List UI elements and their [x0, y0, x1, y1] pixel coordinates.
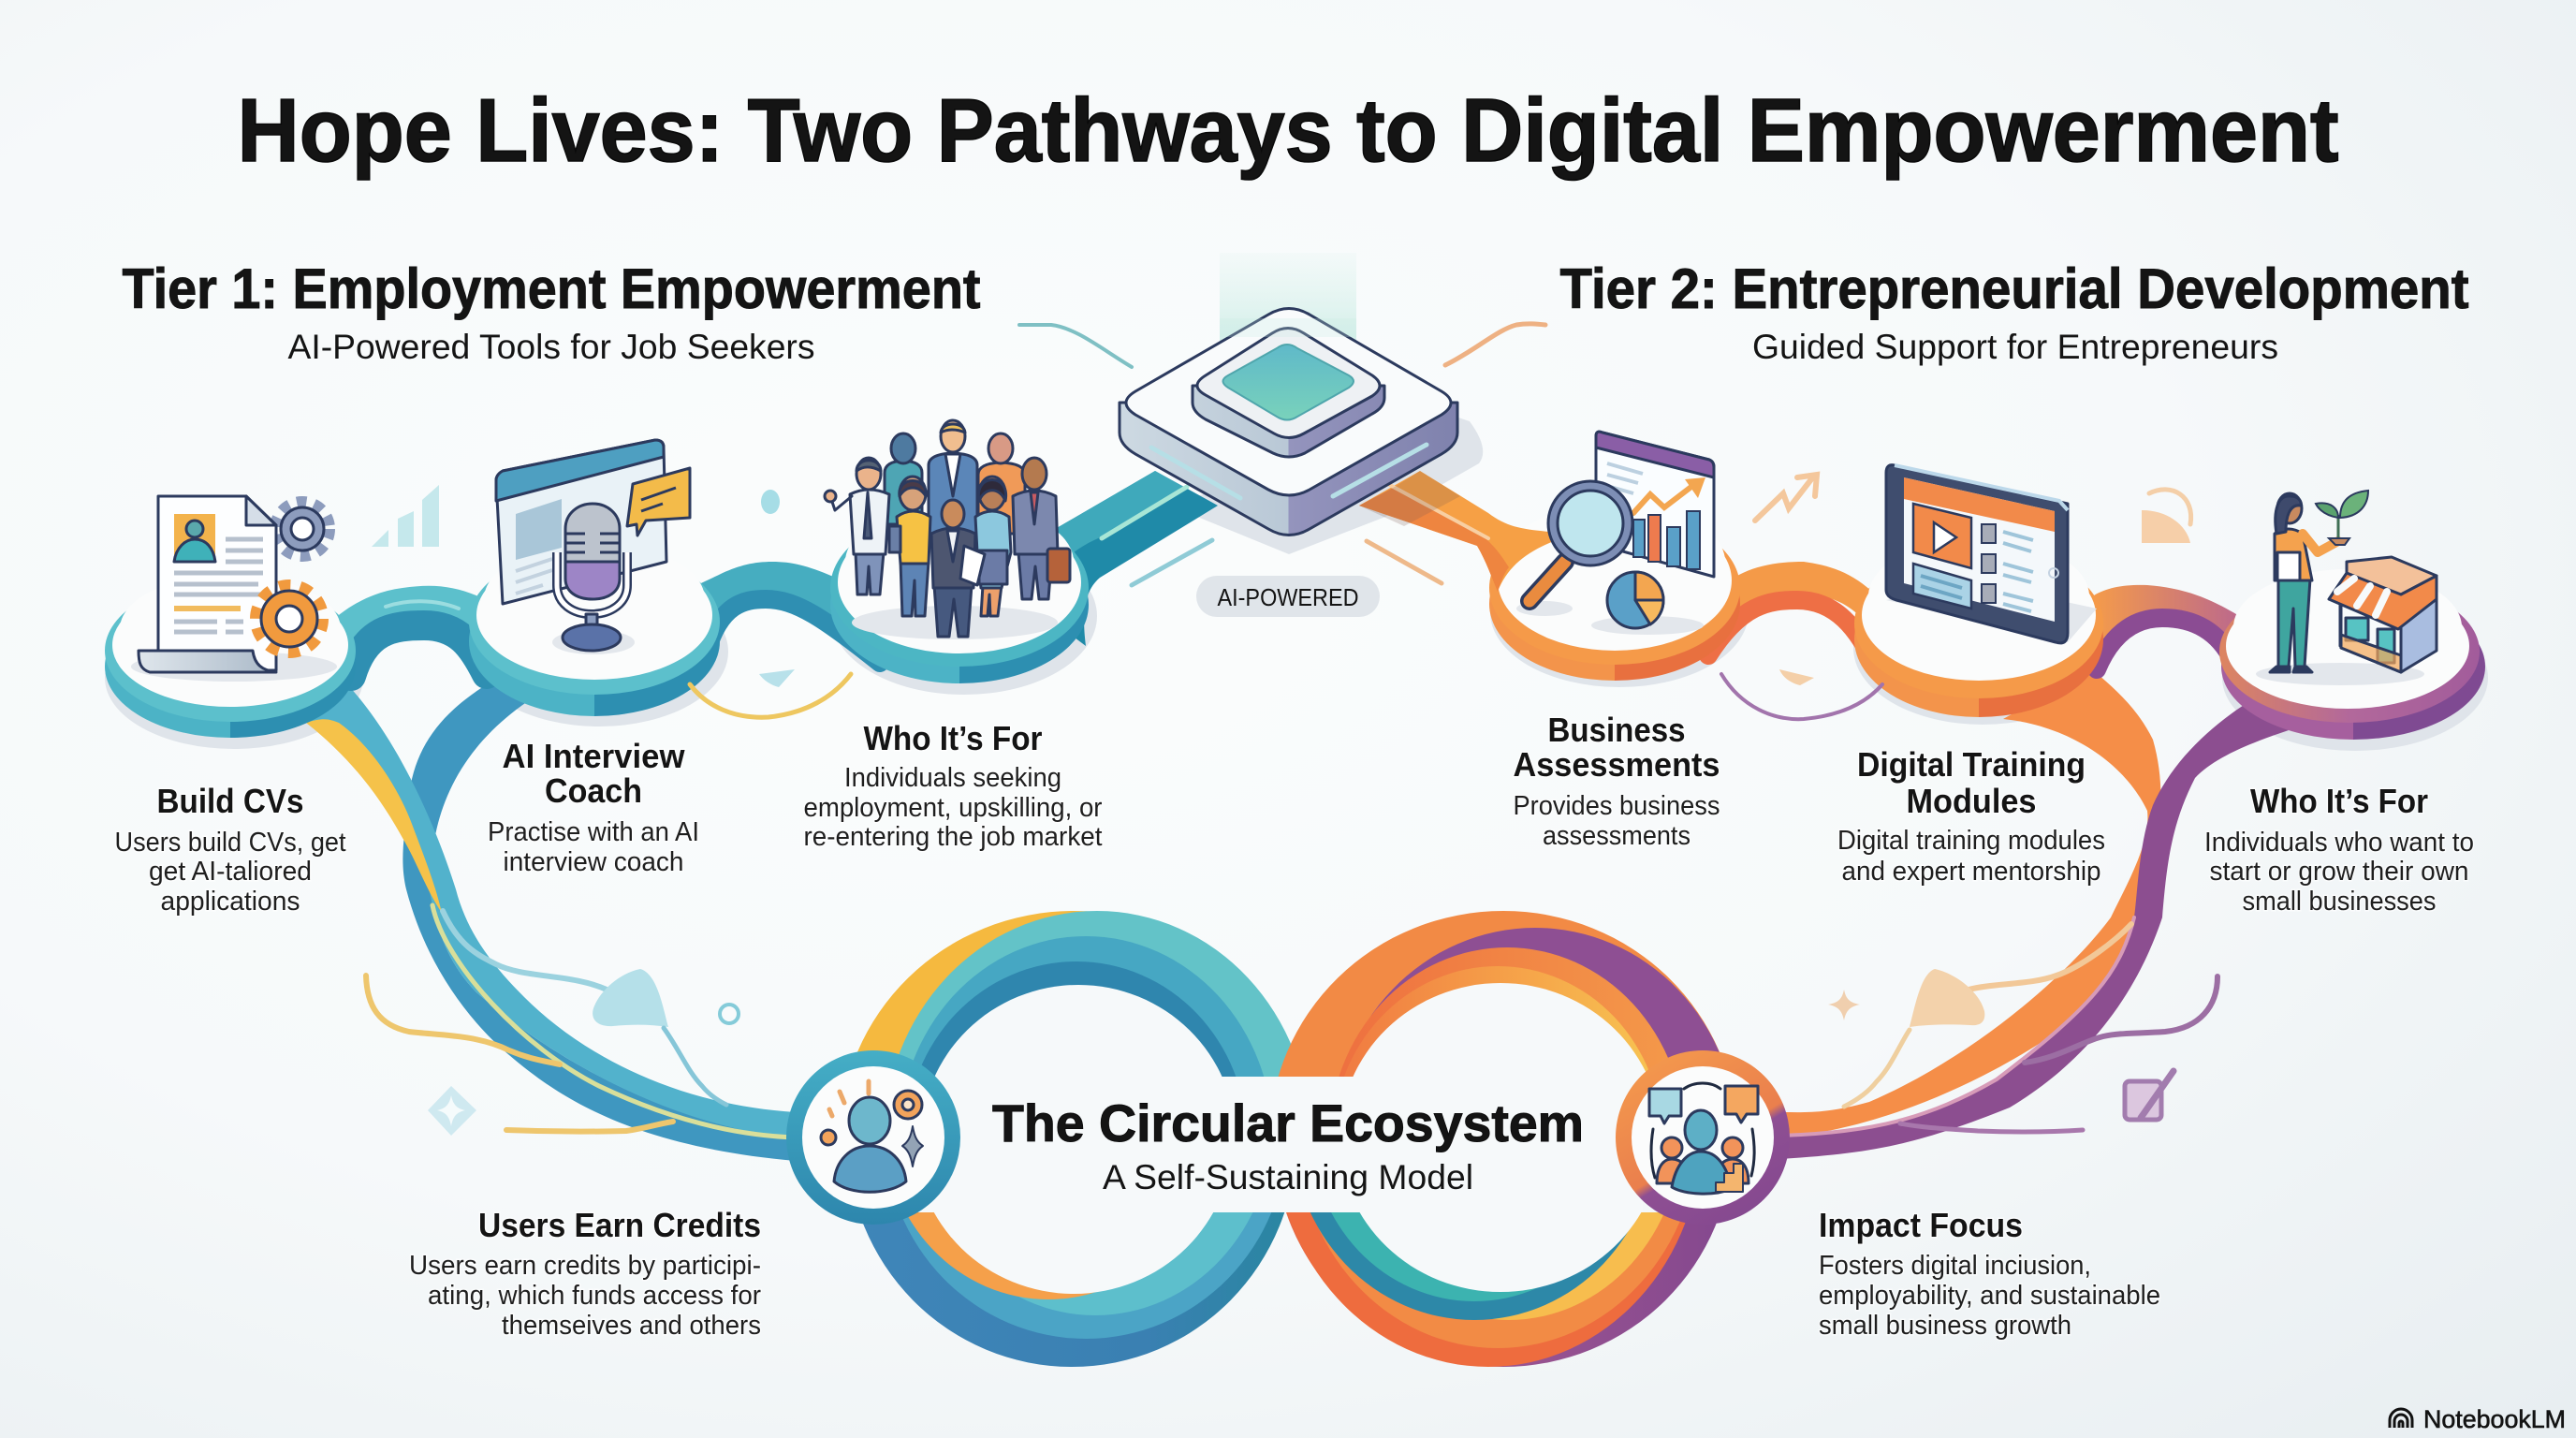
- speech bubble: [627, 468, 690, 536]
- centre heading: the circular ecosystem: A Self-Sustaining Model: [1103, 1158, 1473, 1196]
- road to hub: [1359, 471, 1554, 592]
- label: users earn credits: themseives and others: [502, 1311, 761, 1341]
- magnifier: [1530, 562, 1565, 601]
- icon: CV document with gears: [131, 496, 337, 682]
- icon: refresh decoration: [2142, 490, 2191, 543]
- label: build CVs: [114, 782, 346, 917]
- icon: person with coins: [821, 1091, 923, 1192]
- glowing teal core: [1222, 345, 1354, 419]
- title: Hope Lives: Two Pathways to Digital Empowerment: [238, 81, 2338, 181]
- woman in yellow: [889, 477, 930, 616]
- disc 4: [1489, 527, 1740, 681]
- scroll base: [139, 651, 276, 672]
- icon: growth arrow decoration: [1755, 475, 1817, 521]
- label: who it's for, tier 1: [803, 719, 1103, 852]
- tier 1 heading: Tier 1: Employment Empowerment: [122, 257, 981, 320]
- hub accent lines: [1019, 324, 1545, 585]
- label: users earn credits: Users earn credits by participi-: [409, 1251, 761, 1281]
- connector 5-6: [2073, 585, 2254, 655]
- AI hub chip: [1120, 253, 1457, 536]
- label: who it's for, tier 1: Who It’s For: [863, 719, 1043, 757]
- centre heading: the circular ecosystem: The Circular Ecosystem: [992, 1093, 1584, 1152]
- orange gear: [256, 586, 322, 652]
- right chain ribbon to AI hub: [1359, 471, 2485, 740]
- left main ribbon sweep: [300, 679, 796, 1161]
- tier 1 heading: [122, 257, 981, 366]
- icon: teal drop: [761, 490, 780, 514]
- centre heading: the circular ecosystem: [992, 1093, 1584, 1196]
- label: digital training modules: and expert mentorship: [1842, 857, 2100, 887]
- icon: notebook arcs: [2390, 1409, 2412, 1428]
- connector 2-3: [688, 562, 866, 651]
- label: AI interview coach: Coach: [545, 771, 642, 810]
- shop: [2329, 557, 2437, 672]
- centre plate: [936, 1077, 1643, 1212]
- man in white shirt: [825, 458, 889, 594]
- label: business assessments: Assessments: [1513, 745, 1720, 784]
- trend arrow: [1633, 483, 1696, 513]
- label: digital training modules: Modules: [1906, 782, 2037, 820]
- icon: group of job seekers: [825, 420, 1070, 639]
- label: users earn credits: Users Earn Credits: [478, 1206, 761, 1244]
- label: build CVs: get AI-taliored: [149, 857, 312, 887]
- tier 2 heading: Guided Support for Entrepreneurs: [1752, 328, 2278, 366]
- circular ecosystem infinity rings: [840, 899, 1737, 1368]
- label: digital training modules: Digital Training: [1857, 745, 2086, 784]
- AI-powered badge: [1196, 576, 1380, 617]
- chip inner tier: [1193, 386, 1384, 457]
- disc 5: [1854, 562, 2103, 717]
- beam overlay: [1220, 318, 1356, 337]
- right ring bottom: [1286, 1212, 1717, 1367]
- icon: entrepreneur with shop: [2256, 491, 2437, 685]
- label: build CVs: Build CVs: [157, 782, 303, 820]
- tier 2 heading: Tier 2: Entrepreneurial Development: [1559, 257, 2469, 320]
- label: who it's for, tier 1: re-entering the job market: [803, 822, 1103, 852]
- left chain ribbon to AI hub: [105, 471, 1218, 738]
- gray gear: [276, 503, 329, 555]
- chip body: [1120, 403, 1457, 536]
- label: who it's for, tier 1: Individuals seeking: [844, 763, 1061, 793]
- icon: rising bars decoration: [372, 485, 439, 547]
- label: who it's for, tier 2: [2204, 782, 2474, 917]
- label: build CVs: applications: [161, 887, 300, 917]
- mic capsule: [565, 504, 620, 562]
- video panel: [1913, 504, 1971, 568]
- label: AI interview coach: AI Interview: [502, 737, 685, 775]
- icon: microphone on browser: [496, 440, 690, 654]
- label: impact focus: [1819, 1206, 2160, 1341]
- ribbon and hub shadows: [105, 412, 2488, 751]
- left decorative leaf and flourishes: [366, 911, 739, 1136]
- connector 1-2: [323, 586, 505, 646]
- icon: magnifier and charts: [1516, 432, 1714, 635]
- label: who it's for, tier 2: small businesses: [2243, 887, 2436, 917]
- label: impact focus: employability, and sustainable: [1819, 1281, 2160, 1311]
- disc 3: [830, 526, 1089, 683]
- label: impact focus: Fosters digital inciusion,: [1819, 1251, 2091, 1281]
- purple arc decoration: [1721, 669, 1882, 719]
- thumbnails: [1982, 524, 1996, 543]
- left ring bottom: [863, 1212, 1284, 1367]
- woman: [2270, 493, 2338, 672]
- icon: community with speech bubbles: [1649, 1086, 1758, 1194]
- mic stand: [586, 614, 597, 629]
- right ring top: [1279, 911, 1720, 1077]
- tier 1 heading: AI-Powered Tools for Job Seekers: [288, 328, 814, 366]
- label: business assessments: [1513, 711, 1720, 851]
- chart window: [1596, 432, 1714, 577]
- label: who it's for, tier 2: Who It’s For: [2250, 782, 2428, 820]
- right main ribbon sweep: [1778, 669, 2289, 1159]
- label: business assessments: Provides business: [1513, 791, 1720, 821]
- beam of light: [1220, 253, 1356, 384]
- right decorative leaf and flourishes: [1828, 924, 2217, 1132]
- back row: [885, 420, 1025, 534]
- disc 6: [2221, 594, 2485, 740]
- yellow arc decoration: [690, 669, 851, 717]
- NotebookLM footer mark: NotebookLM: [2423, 1405, 2566, 1433]
- label: who it's for, tier 2: start or grow their own: [2209, 857, 2469, 887]
- plant: [2316, 491, 2368, 545]
- pie chart: [1607, 572, 1663, 628]
- label: AI interview coach: interview coach: [504, 847, 683, 877]
- bar chart: [1633, 520, 1645, 557]
- man in gray suit with briefcase: [1013, 458, 1070, 599]
- label: impact focus: small business growth: [1819, 1311, 2071, 1341]
- label: digital training modules: [1837, 745, 2105, 887]
- connector 4-5: [1708, 562, 1886, 651]
- man in dark suit: [931, 500, 985, 637]
- AI-powered badge: AI-POWERED: [1217, 583, 1359, 611]
- label: users earn credits: [409, 1206, 761, 1341]
- road to hub: [1039, 471, 1218, 646]
- woman in light blue: [975, 477, 1011, 616]
- icon: tablet with video: [1886, 465, 2097, 643]
- node: users earn credits: [786, 1050, 960, 1225]
- disc 1: [105, 595, 356, 738]
- label: impact focus: Impact Focus: [1819, 1206, 2023, 1244]
- label: build CVs: Users build CVs, get: [114, 828, 346, 858]
- mic holder: [557, 552, 627, 614]
- browser window: [496, 440, 666, 604]
- document: [158, 496, 276, 670]
- label: business assessments: Business: [1548, 711, 1685, 749]
- left ring top: [857, 911, 1291, 1077]
- label: who it's for, tier 2: Individuals who want to: [2204, 828, 2474, 858]
- label: digital training modules: Digital training modules: [1837, 826, 2105, 856]
- label: users earn credits: ating, which funds access for: [428, 1281, 761, 1311]
- label: business assessments: assessments: [1543, 821, 1690, 851]
- label: AI interview coach: Practise with an AI: [488, 817, 699, 847]
- label: who it's for, tier 1: employment, upskilling, or: [803, 793, 1103, 823]
- disc 2: [469, 566, 720, 716]
- node: impact focus: [1616, 1050, 1790, 1225]
- label: AI interview coach: [488, 737, 699, 877]
- tier 2 heading: [1559, 257, 2469, 366]
